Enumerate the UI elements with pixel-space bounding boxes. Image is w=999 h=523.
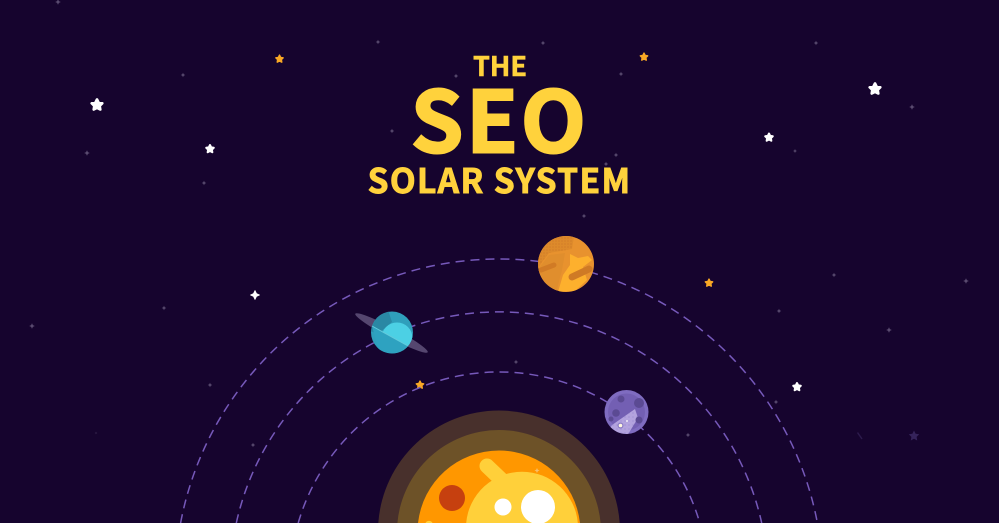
orange stars [276, 53, 713, 388]
small pale star on sun [534, 468, 540, 473]
sun surface features [426, 466, 578, 523]
ring [353, 309, 430, 357]
white stars [92, 84, 880, 390]
sun outer glow [378, 411, 620, 523]
sun body [418, 451, 580, 523]
planet: blue with ring [355, 312, 428, 354]
planet: orange [536, 236, 594, 293]
orbit paths [181, 259, 817, 523]
title line: SOLAR SYSTEM: SOLAR SYSTEM [368, 154, 631, 203]
title line: THE: THE [473, 45, 527, 84]
title [368, 45, 631, 203]
title line: SEO: SEO [411, 54, 588, 178]
sun inner glow [397, 430, 601, 523]
faint star and streak [858, 430, 919, 440]
sun [378, 411, 620, 523]
planet: purple [604, 390, 648, 436]
